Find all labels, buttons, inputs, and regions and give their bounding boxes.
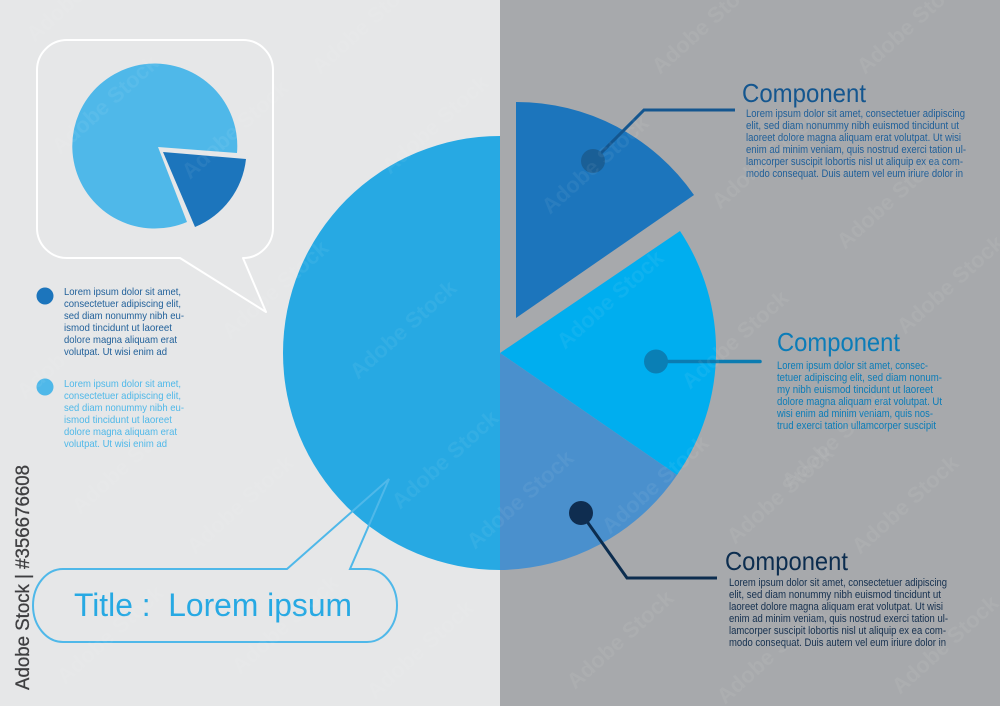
body text: lamcorper suscipit lobortis nisl ut aliquip ex ea com-: [746, 156, 963, 168]
legend text: dark blue: dolore magna aliquam erat: [64, 335, 177, 346]
watermark pattern: Adobe Stock: [887, 590, 1000, 699]
legend text: dark blue: volutpat. Ut wisi enim ad: [64, 347, 167, 358]
legend text: light blue: dolore magna aliquam erat: [64, 427, 177, 438]
heading: Component: [777, 327, 901, 357]
body text: elit, sed diam nonummy nibh euismod tincidunt ut: [729, 589, 941, 601]
body text: [746, 108, 966, 180]
legend text: dark blue: ismod tincidunt ut laoreet: [64, 323, 172, 334]
watermark pattern: Adobe Stock: [52, 580, 169, 689]
body text: laoreet dolore magna aliquam erat volutpat. Ut wisi: [729, 601, 943, 613]
pie slice: bright blue right: [500, 231, 716, 475]
pointer dot: [569, 501, 593, 525]
body text: wisi enim ad minim veniam, quis nos-: [776, 408, 933, 420]
body text: Lorem ipsum dolor sit amet, consectetuer adipiscing: [729, 577, 947, 589]
watermark pattern: Adobe Stock: [722, 440, 839, 549]
watermark pattern: Adobe Stock: [777, 385, 894, 494]
heading: Component: [725, 546, 849, 576]
watermark pattern: Adobe Stock: [345, 275, 462, 384]
legend dot: dark blue: [36, 288, 54, 304]
pointer dot: [644, 350, 668, 374]
watermark pattern: Adobe Stock: [707, 105, 824, 214]
watermark pattern: Adobe Stock: [12, 295, 129, 404]
watermark pattern: Adobe Stock: [677, 285, 794, 394]
pointer line: [593, 110, 735, 161]
title callout: [33, 479, 397, 642]
legend text: light blue: volutpat. Ut wisi enim ad: [64, 439, 167, 450]
watermark pattern: Adobe Stock: [562, 585, 679, 694]
mini pie: dark blue share: [163, 152, 246, 227]
body text: [729, 577, 948, 649]
body text: elit, sed diam nonummy nibh euismod tincidunt ut: [746, 120, 959, 132]
component 3: bottom: [569, 501, 948, 649]
body text: Lorem ipsum dolor sit amet, consectetuer adipiscing: [746, 108, 965, 120]
watermark pattern: Adobe Stock: [182, 450, 299, 559]
component 1: top: [581, 78, 966, 180]
watermark pattern: Adobe Stock: [362, 595, 479, 704]
body text: my nibh euismod tincidunt ut laoreet: [777, 384, 933, 396]
watermark pattern: Adobe Stock: [552, 245, 669, 354]
body text: Lorem ipsum dolor sit amet, consec-: [777, 360, 928, 372]
watermark pattern: Adobe Stock: [832, 145, 949, 254]
pointer dot: [581, 149, 605, 173]
pointer line: [656, 360, 760, 363]
watermark pattern: Adobe Stock: [712, 600, 829, 706]
main pie chart: [283, 102, 716, 570]
watermark pattern: Adobe Stock: [177, 75, 294, 184]
pie slice: muted blue bottom: [500, 353, 677, 570]
panel: left background: [0, 0, 500, 706]
pie slice: exploded dark blue top: [516, 102, 694, 318]
heading: Component: [742, 78, 867, 108]
component 2: middle: [644, 327, 942, 432]
mini pie: light blue share: [72, 64, 237, 229]
legend: light blue item: [36, 378, 184, 450]
legend text: dark blue: sed diam nonummy nibh eu-: [64, 311, 184, 322]
watermark pattern: Adobe Stock: [227, 570, 344, 679]
watermark pattern: Adobe Stock: [597, 430, 714, 539]
body text: dolore magna aliquam erat volutpat. Ut: [777, 396, 942, 408]
legend text: light blue: sed diam nonummy nibh eu-: [64, 403, 184, 414]
body text: lamcorper suscipit lobortis nisl ut aliquip ex ea com-: [729, 625, 946, 637]
speech bubble: white outline with mini pie: [37, 40, 273, 312]
watermark pattern: Adobe Stock: [462, 445, 579, 554]
legend text: light blue: consectetuer adipiscing elit,: [64, 391, 181, 402]
stock id label: Adobe Stock | #356676608: [13, 465, 34, 690]
title bubble outline: [33, 479, 397, 642]
title text: Title : Lorem ipsum: [74, 587, 352, 623]
pie slice: large left half: [283, 136, 500, 570]
body text: laoreet dolore magna aliquam erat volutpat. Ut wisi: [746, 132, 961, 144]
legend text: dark blue: Lorem ipsum dolor sit amet,: [64, 287, 181, 298]
legend text: dark blue: [64, 287, 184, 358]
legend text: light blue: Lorem ipsum dolor sit amet,: [64, 379, 181, 390]
body text: modo consequat. Duis autem vel eum iriure dolor in: [729, 637, 946, 649]
watermark pattern: Adobe Stock: [537, 110, 654, 219]
legend text: dark blue: consectetuer adipiscing elit,: [64, 299, 181, 310]
legend text: light blue: ismod tincidunt ut laoreet: [64, 415, 172, 426]
watermark pattern: Adobe Stock: [217, 235, 334, 344]
legend dot: light blue: [36, 378, 54, 396]
body text: tetuer adipiscing elit, sed diam nonum-: [777, 372, 942, 384]
body text: enim ad minim veniam, quis nostrud exerci tation ul-: [746, 144, 966, 156]
watermark pattern: Adobe Stock: [47, 50, 164, 159]
legend: dark blue item: [36, 287, 184, 358]
panel: right background: [500, 0, 1000, 706]
body text: modo consequat. Duis autem vel eum iriure dolor in: [746, 168, 963, 180]
pointer line: [581, 513, 717, 578]
watermark pattern: Adobe Stock: [387, 405, 504, 514]
watermark pattern: Adobe Stock: [377, 70, 494, 179]
body text: enim ad minim veniam, quis nostrud exerci tation ul-: [729, 613, 948, 625]
watermark pattern: Adobe Stock: [847, 450, 964, 559]
body text: [776, 360, 942, 432]
watermark pattern: Adobe Stock: [67, 410, 184, 519]
legend text: light blue: [64, 379, 184, 450]
body text: trud exerci tation ullamcorper suscipit: [777, 420, 936, 432]
bubble outline: [37, 40, 273, 312]
